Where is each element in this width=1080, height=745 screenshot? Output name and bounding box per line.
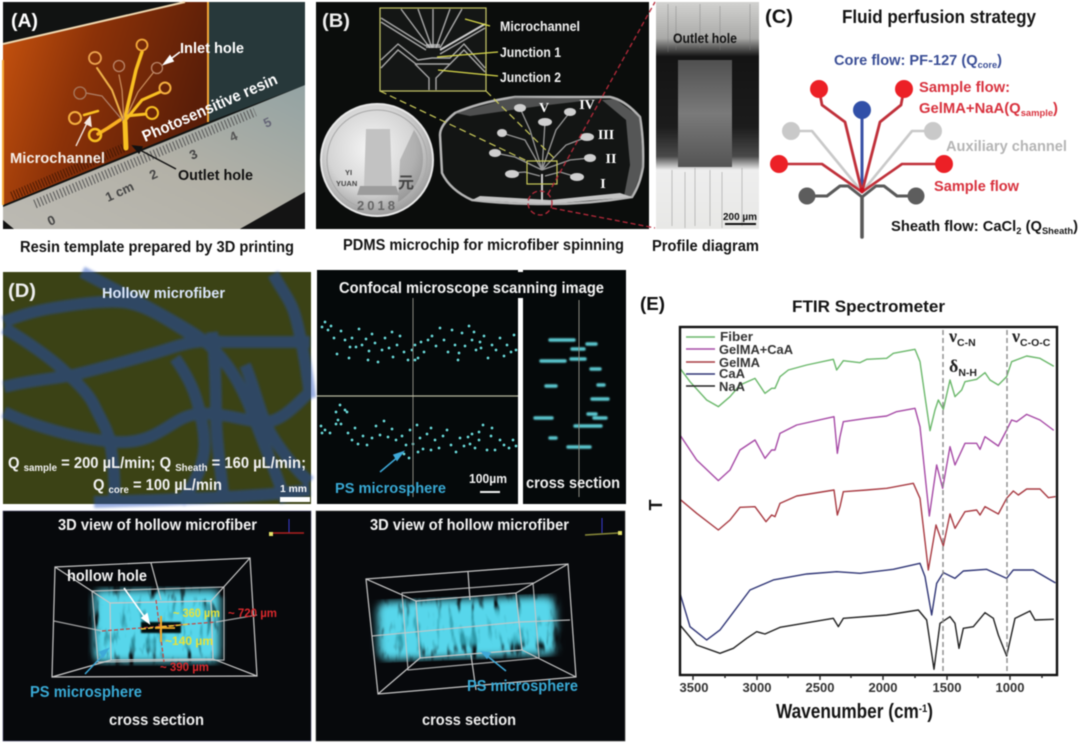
flow rates text: sample (24, 462, 57, 474)
panel C: fluid perfusion strategy (765, 7, 1078, 237)
legend: CaA (719, 366, 746, 381)
microsphere dots (322, 322, 516, 362)
annotation: delta N-H: δ (949, 356, 958, 376)
chip: IV (579, 98, 595, 113)
label: 390 um: ~ 390 µm (160, 660, 209, 674)
flow rates text: Q (93, 477, 105, 494)
label: sheath flow: ) (1073, 218, 1078, 235)
label: inlet hole: Inlet hole (180, 40, 244, 57)
cyan fiber volume (377, 596, 557, 660)
flow rates text: Sheath (175, 462, 208, 474)
x axis tick labels: 2500 (806, 680, 834, 695)
label: cross section: cross section (422, 712, 516, 729)
ruler numbers (45, 114, 274, 229)
annotation: nu C-N: C-N (957, 337, 976, 349)
coin (321, 104, 433, 216)
chip: I (600, 177, 606, 192)
panel E: FTIR spectrometer chart (640, 294, 1057, 723)
label: sheath flow: Sheath (1042, 226, 1073, 237)
measurement lines (102, 600, 216, 662)
chip: V (539, 101, 549, 116)
label: 140 um: ~140 µm (165, 634, 213, 648)
caption: profile diagram: Profile diagram (652, 238, 759, 255)
heading: Fluid perfusion strategy (842, 7, 1036, 27)
icon: microchannel template (69, 40, 170, 148)
arrow: inlet hole (164, 52, 180, 64)
wireframe box (52, 558, 257, 677)
yellow zoom guides (380, 91, 557, 184)
axis icon (585, 518, 622, 535)
arrows: junction labels (437, 19, 498, 76)
panel D: hollow microfiber micrograph (3, 272, 311, 504)
ruler numbers: 2 (147, 166, 160, 183)
x axis tick labels: 1500 (933, 680, 961, 695)
panel letter D: (D) (8, 281, 36, 302)
label: panel heading: Hollow microfiber (102, 285, 225, 302)
y axis title: T (646, 500, 666, 510)
label: sheath flow: 2 (1016, 226, 1021, 237)
x axis tick labels: 3500 (680, 680, 708, 695)
label: junction 2: Junction 2 (500, 69, 561, 85)
chip (440, 97, 643, 204)
arrow: PS microsphere (482, 652, 506, 671)
panel letter A: (A) (11, 11, 38, 32)
label: 720 um: ~ 720 µm (228, 606, 277, 620)
annotation: nu C-N: ν (949, 326, 957, 346)
label: auxiliary channel: Auxiliary channel (946, 138, 1067, 155)
heading: 3D view of hollow microfiber (58, 517, 257, 534)
panel letter B: (B) (322, 11, 350, 32)
label: PS microsphere: PS microsphere (467, 678, 578, 695)
x axis title: Wavenumber (cm (776, 701, 942, 723)
legend: GelMA+CaA (719, 342, 794, 357)
coin: YUAN (336, 179, 357, 188)
label: photosensitive resin: Photosensitive resin (140, 71, 280, 146)
x axis tick labels: 2000 (869, 680, 897, 695)
coin: 2018 (357, 198, 398, 213)
legend: Fiber (720, 329, 753, 344)
cyan fiber volume (94, 590, 220, 662)
channel diagram (779, 89, 944, 237)
legend (686, 329, 794, 394)
arrow: outlet hole (133, 146, 176, 169)
x axis title: -1 (919, 703, 927, 715)
spectra curves (680, 349, 1055, 669)
label: outlet hole: Outlet hole (178, 167, 253, 184)
x axis tick labels: 1000 (996, 680, 1024, 695)
axis icon (269, 519, 304, 536)
inset: junction close-up (380, 8, 498, 91)
x axis tick labels: 3000 (743, 680, 771, 695)
panel D: confocal microscope image (317, 270, 518, 504)
label: microchannel: Microchannel (10, 150, 105, 167)
red zoom guides (528, 2, 655, 228)
flow rates text: = 200 µL/min; Q (57, 455, 175, 472)
label: sample flow top: Sample flow: (919, 79, 1010, 96)
panel D: cross section image (523, 270, 626, 504)
label: cross section: cross section (526, 475, 620, 492)
panel B: PDMS microchip photo (316, 2, 655, 229)
scale bar: 1 mm: 1 mm (280, 484, 307, 495)
ruler numbers: 4 (227, 128, 241, 145)
chip: III (598, 128, 614, 143)
label: sample flow bottom: Sample flow (934, 178, 1019, 195)
scale bar: 1 mm (280, 484, 310, 502)
scale bar: 200 um: 200 µm (723, 212, 757, 223)
ruler numbers: 1 cm (103, 179, 136, 205)
label: 360 um: ~ 360 µm (173, 606, 220, 620)
label: sheath flow: (Q (1021, 218, 1042, 235)
heading: confocal scanning image: Confocal microscope scanning image (339, 280, 604, 297)
label: sheath flow: Sheath flow: CaCl (891, 218, 1019, 235)
arrow: PS microsphere (85, 649, 108, 674)
flow rates text (8, 455, 306, 496)
scale bar: 100 um (469, 472, 507, 493)
annotation: delta N-H: N-H (958, 367, 977, 379)
label: hollow hole: hollow hole (67, 568, 147, 585)
legend: GelMA (719, 355, 761, 370)
label: GelMA+NaA: GelMA+NaA(Q (919, 100, 1022, 117)
flow rates text: = 100 µL/min (129, 477, 222, 494)
label: core flow: core (978, 60, 997, 71)
panel letter E: (E) (640, 294, 665, 314)
caption: panel B: PDMS microchip for microfiber spinning (343, 237, 624, 254)
arrow: PS microsphere (380, 452, 403, 472)
panel D: 3D view right (316, 511, 625, 741)
ruler numbers: 5 (261, 114, 274, 131)
ruler numbers: 3 (187, 146, 200, 163)
x axis title: ) (927, 701, 933, 723)
label: GelMA+NaA: sample (1021, 108, 1053, 119)
heading: 3D view of hollow microfiber (370, 517, 569, 534)
panel A: resin template photo (3, 2, 305, 229)
label: microchannel: Microchannel (500, 18, 580, 34)
panel D: 3D view left (3, 511, 311, 741)
arrow: microchannel (76, 117, 91, 146)
annotation: nu C-O-C: C-O-C (1020, 337, 1051, 349)
x axis tick labels (680, 680, 1024, 695)
wireframe box (366, 564, 576, 694)
chip: II (606, 152, 616, 167)
label: outlet hole: Outlet hole (673, 31, 737, 46)
label: GelMA+NaA: ) (1053, 100, 1058, 117)
ruler numbers: 0 (45, 212, 58, 229)
flow rates text: Q (8, 455, 20, 472)
panel letter C: (C) (765, 7, 793, 28)
flow rates text: = 160 µL/min; (208, 455, 306, 472)
arrow: hollow hole (124, 588, 149, 623)
label: PS microsphere: PS microsphere (30, 684, 142, 701)
label: junction 1: Junction 1 (500, 44, 561, 60)
label: PS microsphere: PS microsphere (335, 480, 446, 497)
label: cross section: cross section (109, 712, 204, 729)
scale bar: 100 um: 100µm (469, 472, 507, 486)
coin: YI (345, 168, 352, 177)
coin: 元 (398, 175, 414, 192)
flow rates text: core (109, 484, 129, 496)
heading: FTIR Spectrometer (792, 297, 945, 316)
reference dashed lines (943, 330, 1007, 675)
label: core flow: Core flow: PF-127 (Q (834, 52, 982, 69)
panel B: profile diagram (656, 2, 759, 229)
chart frame (680, 327, 1057, 680)
label: core flow: ) (997, 52, 1002, 69)
legend: NaA (719, 379, 746, 394)
caption: panel A: Resin template prepared by 3D printing (20, 239, 294, 256)
annotation: nu C-O-C: ν (1012, 326, 1020, 346)
